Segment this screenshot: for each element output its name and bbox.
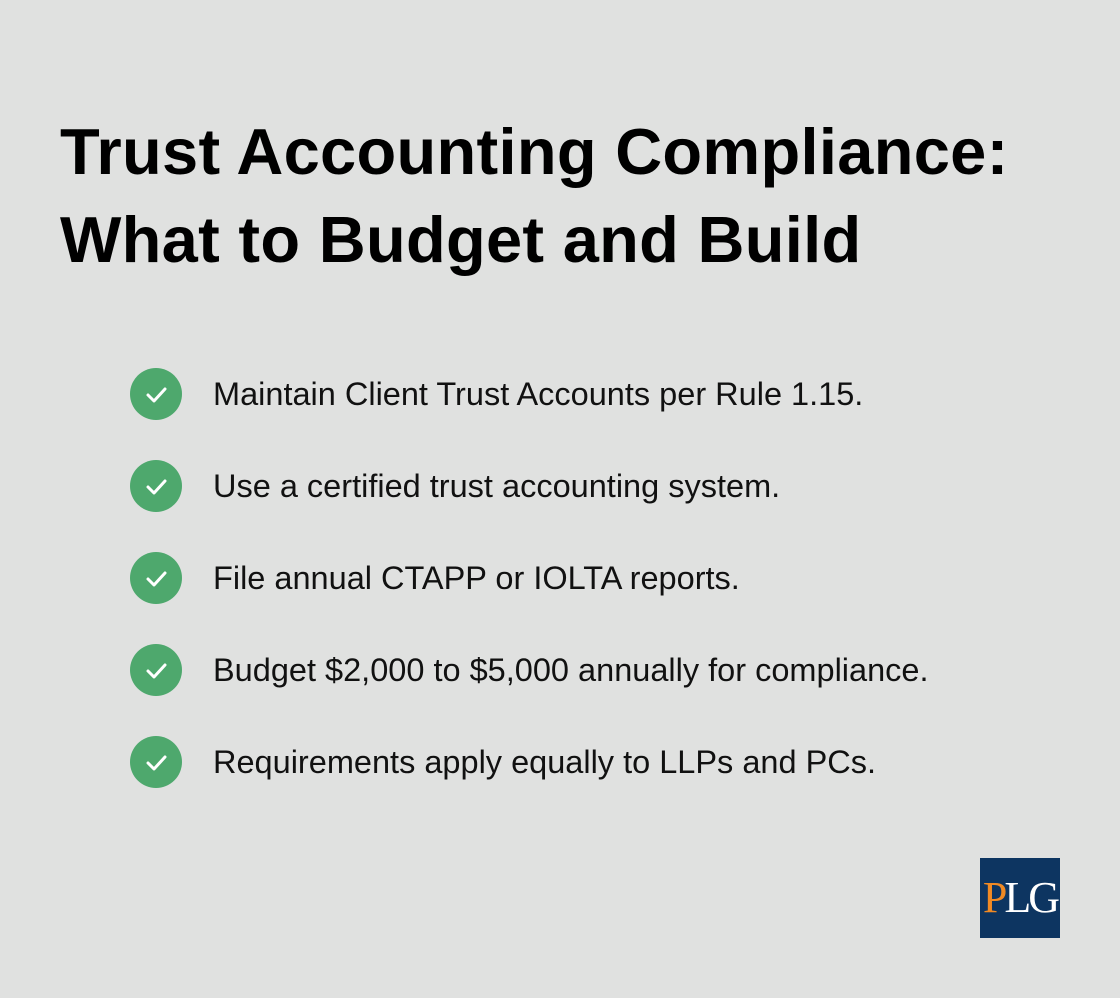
logo: PLG [983,873,1057,922]
icon: check [130,552,182,604]
text: Use a certified trust accounting system. [213,468,780,504]
icon: check [130,644,182,696]
icon: check [130,368,182,420]
icon: check [130,460,182,512]
item 4 [130,644,929,696]
title: Trust Accounting Compliance: [60,115,1009,188]
title: What to Budget and Build [60,203,862,276]
item 2 [130,460,780,512]
logo [980,858,1060,938]
text: File annual CTAPP or IOLTA reports. [213,560,740,596]
item 3 [130,552,740,604]
icon: check [130,736,182,788]
title [60,115,1009,276]
text: Maintain Client Trust Accounts per Rule 1.15. [213,376,863,412]
text: Requirements apply equally to LLPs and PCs. [213,744,876,780]
item 1 [130,368,863,420]
item 5 [130,736,876,788]
text: Budget $2,000 to $5,000 annually for compliance. [213,652,929,688]
